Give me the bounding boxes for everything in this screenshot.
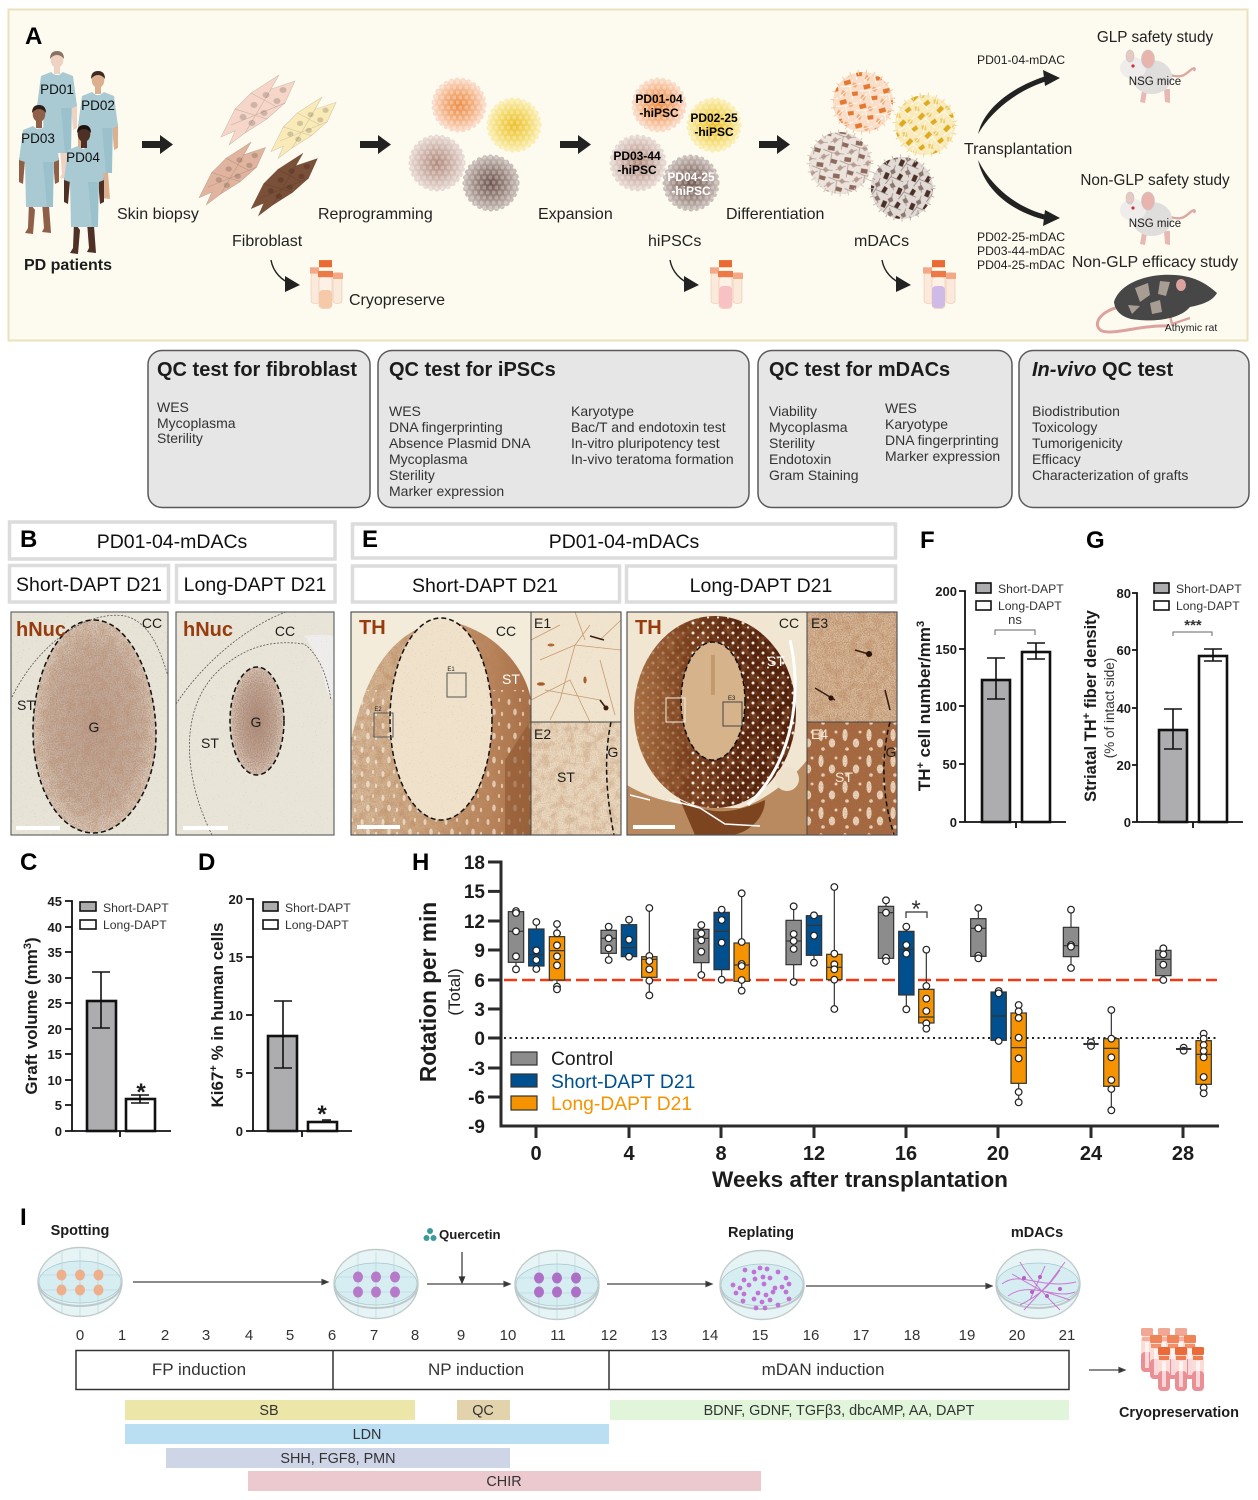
factor bar: SB [125, 1400, 415, 1420]
micrograph: Long-DAPT hNuc: CC [275, 623, 295, 639]
panel: QC test for iPSCs: Absence Plasmid DNA [389, 435, 531, 451]
panel: QC test for mDACs: Gram Staining [769, 467, 858, 483]
panel: in-vivo QC test: In-vivo QC test [1032, 359, 1173, 381]
bar chart D: Ki67+ percent: D [198, 849, 215, 876]
induction stage boxes: NP induction [428, 1360, 524, 1379]
stage: replating [720, 1225, 804, 1320]
bar chart G: striatal TH+ fiber density: Short-DAPT [1176, 582, 1242, 596]
hiPSC colonies with line labels [611, 79, 740, 210]
panel: QC test for iPSCs: Sterility [389, 467, 435, 483]
stage: dish day 7 [334, 1250, 418, 1318]
panel B headers: PD01-04-mDACs [97, 531, 248, 553]
line labels for transplant arms: PD04-25-mDAC [977, 258, 1065, 272]
day axis numbers: 15 [752, 1327, 768, 1344]
panel E headers: PD01-04-mDACs [549, 531, 700, 553]
H y-axis tick labels: 12 [464, 912, 485, 933]
factor bar: SHH FGF8 PMN: SHH, FGF8, PMN [280, 1451, 396, 1467]
panel E headers: Short-DAPT D21 [412, 575, 558, 597]
H y-axis tick labels: -9 [468, 1117, 485, 1138]
bar chart D: Ki67+ percent [198, 849, 352, 1139]
H y-axis tick labels: 15 [464, 882, 485, 903]
bar chart D: Ki67+ percent: * [317, 1101, 327, 1128]
day axis numbers: 3 [202, 1327, 210, 1344]
bar chart C: graft volume: C [20, 849, 37, 876]
hiPSC colonies with line labels: PD02-25 [690, 111, 738, 125]
panel: QC test for fibroblast: Sterility [157, 430, 203, 446]
zero dotted line [504, 1037, 1219, 1039]
micrograph: Short-DAPT hNuc: G [89, 719, 99, 735]
bar chart G: striatal TH+ fiber density: 60 [1117, 643, 1131, 658]
day axis numbers: 12 [601, 1327, 617, 1344]
bar chart G: striatal TH+ fiber density: + [1081, 713, 1093, 719]
bar chart F: TH+ cell number: cell number/mm [915, 627, 934, 762]
panel: QC test for iPSCs: In-vivo teratoma formation [571, 451, 734, 467]
H x-axis tick labels: 8 [715, 1143, 727, 1165]
panel B headers: B [20, 526, 37, 553]
H legend [511, 1049, 695, 1115]
H x-axis title: Weeks after transplantation [712, 1167, 1008, 1192]
panel letter I: I [20, 1204, 27, 1231]
bar chart C: graft volume: 45 [48, 894, 62, 909]
day axis numbers: 5 [286, 1327, 294, 1344]
panel: QC test for mDACs [758, 350, 1012, 508]
factor bar: QC [457, 1400, 510, 1420]
panel B headers: Short-DAPT D21 [16, 574, 162, 596]
H x-axis tick labels: 24 [1080, 1143, 1103, 1165]
H x-axis tick labels [530, 1143, 1194, 1165]
panel E: TH staining [351, 524, 897, 835]
bar chart C: graft volume: Long-DAPT [103, 918, 167, 932]
day axis numbers: 8 [411, 1327, 419, 1344]
inset E1: E1 [534, 615, 551, 631]
bar chart F: TH+ cell number: ns [1008, 612, 1022, 627]
day axis numbers: 10 [500, 1327, 516, 1344]
bar chart C: graft volume: 15 [48, 1047, 62, 1062]
box plot H: rotation per min over weeks [412, 849, 1219, 1192]
arrow to cryopreservation [1089, 1368, 1125, 1372]
arrow 4 [806, 1284, 992, 1288]
inset E2: ST [557, 769, 575, 785]
panel letter A: A [25, 23, 42, 50]
hiPSCs label: hiPSCs [648, 233, 701, 250]
H y-axis title: Rotation per min [415, 902, 441, 1082]
day axis numbers: 18 [904, 1327, 920, 1344]
panel: QC test for mDACs: Viability [769, 403, 817, 419]
day axis numbers: 2 [161, 1327, 169, 1344]
bar chart F: TH+ cell number: 50 [943, 757, 957, 772]
induction stage boxes: FP induction [152, 1360, 246, 1379]
induction stage boxes: mDAN induction [762, 1360, 884, 1379]
panel: in-vivo QC test [1019, 350, 1249, 508]
hiPSC colonies with line labels: -hiPSC [671, 184, 711, 198]
bar chart G: striatal TH+ fiber density: Long-DAPT [1176, 599, 1240, 613]
line labels for transplant arms: PD03-44-mDAC [977, 244, 1065, 258]
panel: QC test for mDACs: Karyotype [885, 416, 948, 432]
factor bar: LDN [125, 1424, 609, 1444]
H y-axis tick labels: 0 [474, 1029, 485, 1050]
bar chart D: Ki67+ percent: 0 [236, 1124, 243, 1139]
bar chart F: TH+ cell number: + [915, 762, 927, 768]
H x-axis tick labels: 20 [987, 1143, 1009, 1165]
H y-axis tick labels: -6 [468, 1088, 485, 1109]
day axis numbers: 17 [853, 1327, 869, 1344]
factor bar: LDN: LDN [353, 1427, 381, 1443]
panel B headers [10, 522, 335, 602]
bar chart C: graft volume: 40 [48, 920, 62, 935]
arrow: skin biopsy [142, 135, 173, 154]
bar chart F: TH+ cell number: 150 [935, 642, 957, 657]
H x-axis tick labels: 16 [895, 1143, 917, 1165]
bar chart C: graft volume: Graft volume (mm [22, 949, 41, 1095]
factor bar: CHIR: CHIR [486, 1474, 522, 1490]
factor bar: mDAN factors: BDNF, GDNF, TGFβ3, dbcAMP, AA, DAPT [704, 1403, 975, 1419]
expansion label: Expansion [538, 206, 613, 223]
panel E headers [352, 524, 896, 602]
box plot H: rotation per min over weeks: H [412, 849, 429, 876]
PD patients label: PD patients [24, 257, 112, 274]
threshold line at 6 rpm [504, 979, 1217, 981]
panel: QC test for fibroblast: WES [157, 399, 189, 415]
PD patients figures: PD03 [21, 131, 55, 146]
hiPSC colonies with line labels: -hiPSC [694, 125, 734, 139]
micrograph: Short-DAPT hNuc: hNuc [16, 619, 66, 641]
bar chart F: TH+ cell number: 200 [935, 584, 957, 599]
bar chart G: striatal TH+ fiber density: *** [1184, 617, 1202, 634]
bar chart D: Ki67+ percent: 20 [229, 892, 243, 907]
H y-axis tick labels: 9 [474, 941, 485, 962]
GLP safety study label: GLP safety study [1097, 29, 1213, 46]
bar chart F: TH+ cell number: Long-DAPT [998, 599, 1062, 613]
panel: in-vivo QC test: Tumorigenicity [1032, 435, 1123, 451]
day axis numbers: 11 [550, 1327, 566, 1344]
H y-axis tick labels: 6 [474, 971, 485, 992]
bar chart D: Ki67+ percent: % in human cells [208, 922, 227, 1065]
panel I: differentiation timeline [20, 1204, 1239, 1491]
day axis numbers: 1 [118, 1327, 126, 1344]
H x-axis tick labels: 12 [803, 1143, 825, 1165]
icon: NSG mouse, GLP [1120, 50, 1195, 103]
inset E3: E3 [811, 615, 828, 631]
bar chart C: graft volume: 25 [48, 996, 62, 1011]
H y-axis tick labels [464, 853, 485, 1138]
micrograph: Short-DAPT TH: TH [359, 617, 386, 639]
day axis numbers: 14 [702, 1327, 718, 1344]
differentiation label: Differentiation [726, 206, 824, 223]
panel: QC test for mDACs: Sterility [769, 435, 815, 451]
panel E headers: Long-DAPT D21 [690, 575, 832, 597]
micrograph: Short-DAPT hNuc [11, 612, 168, 836]
panel: QC test for iPSCs: Bac/T and endotoxin test [571, 419, 726, 435]
bar chart C: graft volume: 30 [48, 971, 62, 986]
H x-axis tick labels: 4 [623, 1143, 635, 1165]
hiPSC colonies with line labels: PD03-44 [613, 149, 661, 163]
reprogramming label: Reprogramming [318, 206, 433, 223]
arrow: quercetin down [460, 1252, 464, 1283]
panel: QC test for mDACs: DNA fingerprinting [885, 432, 999, 448]
inset E4: G [886, 744, 896, 760]
micrograph: Short-DAPT TH [351, 612, 531, 835]
panel: QC test for mDACs: Marker expression [885, 448, 1000, 464]
fibroblast label: Fibroblast [232, 233, 303, 250]
panel: QC test for fibroblast: Mycoplasma [157, 415, 236, 431]
H legend: Control [551, 1049, 613, 1070]
panel: QC test for mDACs: Mycoplasma [769, 419, 848, 435]
inset E4: ST [835, 769, 853, 785]
icon: NSG mouse, non-GLP: NSG mice [1129, 218, 1181, 230]
bar chart F: TH+ cell number: 100 [935, 699, 957, 714]
arrow 3 [607, 1282, 712, 1286]
H legend: Short-DAPT D21 [551, 1072, 695, 1093]
bar chart D: Ki67+ percent: + [208, 1065, 220, 1072]
factor bar: CHIR [248, 1471, 761, 1491]
line labels for transplant arms [977, 53, 1065, 272]
panel: QC test for mDACs: QC test for mDACs [769, 359, 950, 381]
bar chart C: graft volume: 35 [48, 945, 62, 960]
cryopreserve vial: fibroblast [271, 260, 343, 309]
micrograph: Short-DAPT hNuc: ST [17, 697, 35, 713]
inset E4 [807, 722, 897, 835]
day axis numbers: 6 [328, 1327, 336, 1344]
day axis numbers: 20 [1009, 1327, 1025, 1344]
micrograph: Short-DAPT TH: E2 [374, 707, 382, 713]
hiPSC colonies with line labels: PD04-25 [667, 170, 715, 184]
icon: NSG mouse, GLP: NSG mice [1129, 76, 1181, 88]
inset E3 [807, 612, 897, 722]
cryopreserve vial: hiPSC [670, 260, 743, 309]
panel: QC test for fibroblast: QC test for fibroblast [157, 359, 357, 381]
day axis numbers: 21 [1059, 1327, 1075, 1344]
bar chart G: striatal TH+ fiber density: 80 [1117, 586, 1131, 601]
micrograph: Short-DAPT hNuc: CC [142, 615, 162, 631]
line labels for transplant arms: PD01-04-mDAC [977, 53, 1065, 67]
bar chart F: TH+ cell number [915, 527, 1066, 830]
bar chart G: striatal TH+ fiber density: G [1086, 527, 1105, 554]
micrograph: Long-DAPT TH: TH [635, 617, 662, 639]
non-GLP safety study label: Non-GLP safety study [1080, 172, 1230, 189]
bar chart D: Ki67+ percent: 15 [229, 950, 243, 965]
bar chart G: striatal TH+ fiber density: (% of intact side) [1102, 658, 1117, 758]
factor bar: mDAN factors [610, 1400, 1069, 1420]
bar chart G: striatal TH+ fiber density: Striatal TH [1082, 719, 1100, 802]
H y-axis tick labels: 18 [464, 853, 485, 874]
day axis numbers: 0 [76, 1327, 84, 1344]
fibroblast clusters [199, 75, 336, 216]
icon: athymic rat: Athymic rat [1165, 322, 1217, 334]
PD patients figures: PD01 [40, 82, 74, 97]
hiPSC colonies with line labels: -hiPSC [639, 106, 679, 120]
micrograph: Long-DAPT TH: CC [779, 615, 799, 631]
panel: QC test for iPSCs: Karyotype [571, 403, 634, 419]
H axes [488, 862, 1219, 1138]
cryopreserve label: Cryopreserve [349, 292, 445, 309]
transplantation curved arrows [978, 70, 1060, 226]
day axis numbers: 4 [245, 1327, 253, 1344]
bar chart G: striatal TH+ fiber density: fiber density [1082, 609, 1100, 713]
micrograph: Long-DAPT hNuc: G [251, 714, 261, 730]
bar chart F: TH+ cell number: TH [915, 768, 934, 791]
day axis numbers: 16 [803, 1327, 819, 1344]
mDAC clusters [809, 72, 955, 219]
micrograph: Long-DAPT hNuc: hNuc [183, 619, 233, 641]
bar chart C: graft volume: * [136, 1079, 146, 1106]
inset E2: E2 [534, 726, 551, 742]
panel: QC test for mDACs: Endotoxin [769, 451, 831, 467]
icon: athymic rat [1097, 275, 1217, 334]
stage: mDACs [996, 1225, 1080, 1318]
bar chart G: striatal TH+ fiber density: 0 [1124, 815, 1131, 830]
panel E headers: E [362, 526, 378, 553]
day axis numbers [76, 1327, 1075, 1344]
panel: QC test for iPSCs: Mycoplasma [389, 451, 468, 467]
stage: dish day 11 [515, 1250, 599, 1320]
H y-axis tick labels: 3 [474, 1000, 485, 1021]
skin biopsy label: Skin biopsy [117, 206, 199, 223]
bar chart F: TH+ cell number: 0 [950, 815, 957, 830]
iPSC colonies [410, 79, 540, 210]
panel: in-vivo QC test: Efficacy [1032, 451, 1081, 467]
bar chart C: graft volume: 5 [55, 1098, 62, 1113]
panel: QC test for iPSCs: WES [389, 403, 421, 419]
factor bar: SB: SB [259, 1403, 279, 1419]
panel A: manufacturing and transplant workflow [8, 10, 1248, 340]
icon: NSG mouse, non-GLP [1120, 192, 1195, 245]
H x-axis tick labels: 0 [530, 1143, 542, 1165]
day axis numbers: 7 [370, 1327, 378, 1344]
bar chart C: graft volume [20, 849, 171, 1139]
cryopreservation label: Cryopreservation [1119, 1405, 1239, 1421]
H x-axis tick labels: 28 [1172, 1143, 1194, 1165]
bar chart C: graft volume: ) [22, 937, 41, 943]
arrow: reprogramming [360, 135, 391, 154]
significance bracket week 16 [906, 896, 927, 923]
significance bracket week 16: * [911, 896, 921, 923]
non-GLP efficacy study label: Non-GLP efficacy study [1072, 254, 1238, 271]
bar chart D: Ki67+ percent: Ki67 [208, 1072, 227, 1108]
icon: cryopreservation tubes [1141, 1328, 1204, 1391]
weeks 16-28 boxes [878, 897, 1211, 1114]
bar chart C: graft volume: 10 [48, 1073, 62, 1088]
panel: QC test for mDACs: WES [885, 400, 917, 416]
day axis numbers: 13 [651, 1327, 667, 1344]
inset E1 [531, 612, 621, 722]
arrow: expansion [560, 135, 591, 154]
bar chart C: graft volume: 20 [48, 1022, 62, 1037]
line labels for transplant arms: PD02-25-mDAC [977, 230, 1065, 244]
bar chart D: Ki67+ percent: Long-DAPT [285, 918, 349, 932]
inset E2 [531, 722, 621, 835]
day axis numbers: 9 [457, 1327, 465, 1344]
arrow 2 [427, 1282, 510, 1286]
panel B: hNuc staining [10, 522, 335, 836]
transplantation label: Transplantation [964, 141, 1072, 158]
micrograph: Short-DAPT TH: ST [502, 671, 520, 687]
panel: in-vivo QC test: Biodistribution [1032, 403, 1120, 419]
micrograph: Long-DAPT TH: E3 [728, 696, 736, 702]
mDACs label: mDACs [854, 233, 909, 250]
induction stage boxes [76, 1350, 1069, 1390]
bar chart G: striatal TH+ fiber density: 40 [1117, 701, 1131, 716]
PD patients figures [19, 51, 118, 254]
factor bar: QC: QC [472, 1403, 494, 1419]
panel: QC test for iPSCs: QC test for iPSCs [389, 359, 556, 381]
panel: QC test for iPSCs: DNA fingerprinting [389, 419, 503, 435]
bar chart C: graft volume: 3 [22, 943, 34, 949]
PD patients figures: PD04 [66, 150, 100, 165]
micrograph: Short-DAPT TH: E1 [447, 667, 455, 673]
stage: spotting [38, 1223, 122, 1316]
hiPSC colonies with line labels: PD01-04 [635, 92, 683, 106]
inset E2: G [608, 744, 618, 760]
stage: spotting: Spotting [51, 1223, 109, 1239]
panel B headers: Long-DAPT D21 [184, 574, 326, 596]
hiPSC colonies with line labels: -hiPSC [617, 163, 657, 177]
inset E4: E4 [811, 726, 828, 742]
stage: mDACs: mDACs [1011, 1225, 1063, 1241]
micrograph: Long-DAPT hNuc: ST [201, 735, 219, 751]
panel: QC test for iPSCs: In-vitro pluripotency test [571, 435, 720, 451]
micrograph: Long-DAPT TH: ST [767, 653, 785, 669]
panel: QC test for iPSCs: Marker expression [389, 483, 504, 499]
H y-axis subtitle: (Total) [445, 968, 464, 1016]
H legend: Long-DAPT D21 [551, 1094, 692, 1115]
bar chart D: Ki67+ percent: 5 [236, 1066, 243, 1081]
cryopreserve vial: mDAC [882, 260, 956, 309]
arrow 1 [133, 1280, 328, 1284]
bar chart F: TH+ cell number: F [920, 527, 935, 554]
micrograph: Short-DAPT TH: CC [496, 623, 516, 639]
bar chart C: graft volume: Short-DAPT [103, 901, 169, 915]
bar chart D: Ki67+ percent: 10 [229, 1008, 243, 1023]
factor bar: SHH FGF8 PMN [166, 1448, 510, 1468]
bar chart G: striatal TH+ fiber density: 20 [1117, 758, 1131, 773]
quercetin label with icon: Quercetin [439, 1227, 501, 1242]
weeks 0-12 boxes [508, 884, 842, 1012]
H y-axis tick labels: -3 [468, 1059, 485, 1080]
day axis numbers: 19 [959, 1327, 975, 1344]
panel: QC test for iPSCs [378, 350, 749, 508]
micrograph: Long-DAPT hNuc [176, 612, 334, 835]
panel: QC test for fibroblast [148, 350, 370, 508]
bar chart F: TH+ cell number: 3 [915, 621, 927, 627]
bar chart D: Ki67+ percent: Short-DAPT [285, 901, 351, 915]
bar chart C: graft volume: 0 [55, 1124, 62, 1139]
stage: replating: Replating [728, 1225, 794, 1241]
panel: in-vivo QC test: Characterization of grafts [1032, 467, 1188, 483]
bar chart G: striatal TH+ fiber density [1081, 527, 1243, 830]
arrow: differentiation [759, 135, 790, 154]
micrograph: Long-DAPT TH [627, 612, 807, 835]
panel: in-vivo QC test: Toxicology [1032, 419, 1097, 435]
bar chart F: TH+ cell number: Short-DAPT [998, 582, 1064, 596]
PD patients figures: PD02 [81, 98, 115, 113]
